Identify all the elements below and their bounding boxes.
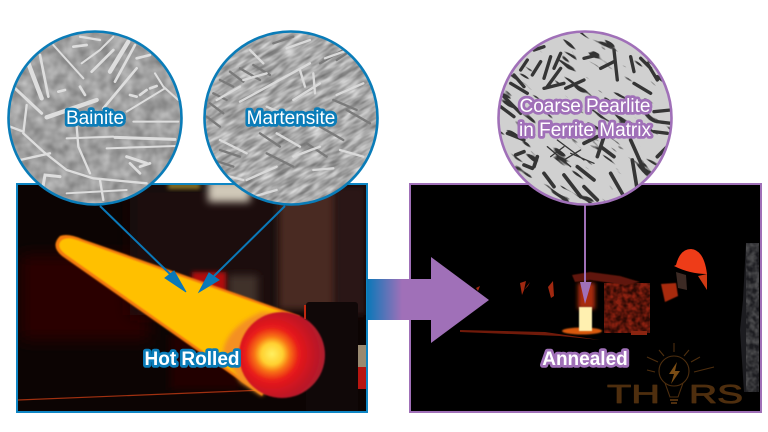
panel: hot rolled photo bbox=[16, 180, 368, 413]
floor rail bbox=[18, 390, 265, 400]
logo wordmark left: TH bbox=[607, 379, 660, 409]
label: annealed: Annealed bbox=[542, 349, 628, 370]
logo wordmark right: RS bbox=[689, 379, 743, 409]
arrow: martensite to bar bbox=[214, 206, 285, 276]
circle: bainite micrograph bbox=[8, 31, 182, 205]
circle: martensite micrograph bbox=[203, 30, 379, 206]
arrow: transformation hot rolled to annealed bbox=[367, 257, 489, 343]
worker bbox=[661, 249, 707, 302]
glowing steel bar bbox=[55, 235, 325, 398]
grey pillar bbox=[740, 243, 759, 392]
label: coarse pearlite in ferrite matrix: Coarse Pearlite bbox=[520, 96, 650, 117]
arrow: pearlite to billet bbox=[580, 205, 592, 304]
photo background bbox=[18, 185, 366, 392]
hot billet bbox=[579, 307, 592, 331]
arrow: bainite to bar bbox=[100, 206, 170, 274]
logo: THRS bbox=[607, 343, 743, 409]
label: martensite: Martensite bbox=[247, 108, 335, 129]
label: coarse pearlite in ferrite matrix: in Ferrite Matrix bbox=[519, 120, 651, 141]
panel: annealed photo bbox=[409, 183, 762, 413]
circle: coarse pearlite micrograph bbox=[497, 30, 673, 206]
label: bainite: Bainite bbox=[66, 108, 124, 129]
bar end face bbox=[239, 312, 325, 398]
forge glow bbox=[460, 272, 650, 340]
label: hot rolled: Hot Rolled bbox=[144, 349, 240, 370]
